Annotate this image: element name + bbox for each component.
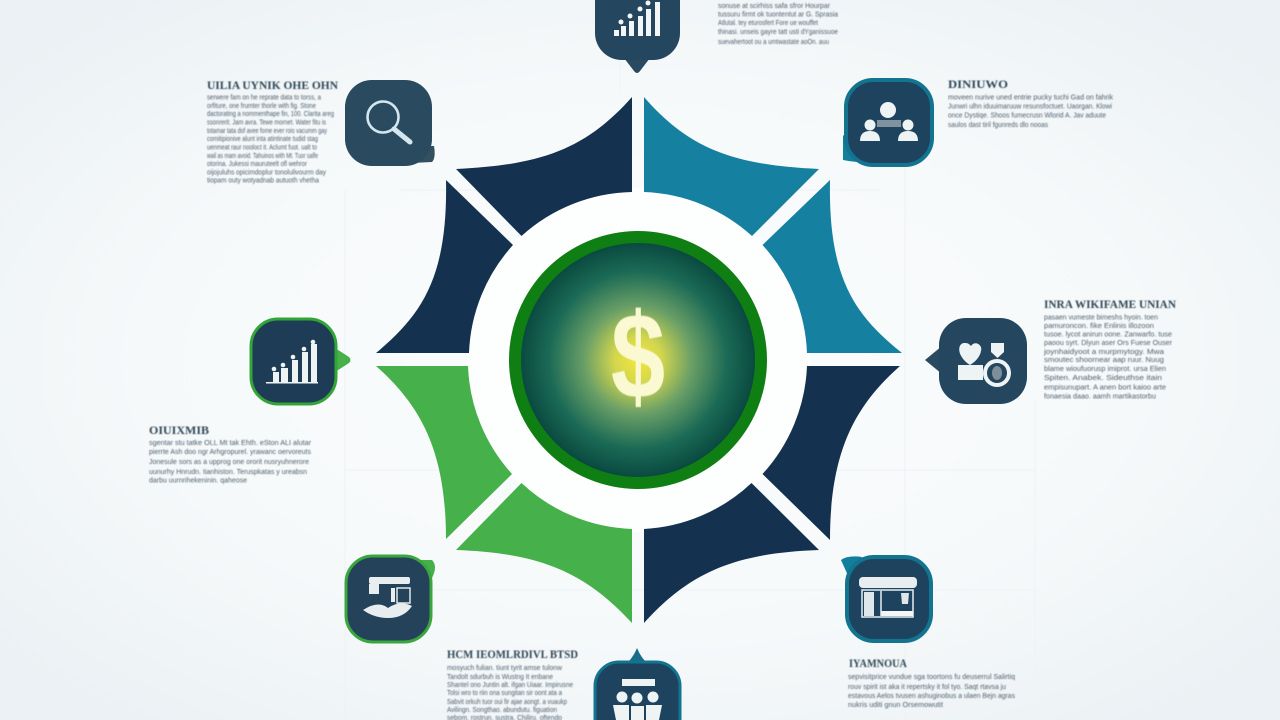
icon: coin and shield — [925, 318, 1027, 404]
text block: upper right — [948, 77, 1113, 129]
text block: upper left: dactorating a nommenthape fin, 100. Clarita areg — [207, 111, 334, 118]
text block: top: suevahertoot ou a umtwastate aoOn. auu — [718, 39, 829, 46]
text block: upper left: UILIA UYNIK OHE OHN — [207, 78, 338, 92]
text block: right — [1043, 297, 1176, 400]
text block: upper left: otorina. Jukessi mauruteelt ofl wehror — [207, 161, 308, 168]
icon: magnifying glass — [345, 80, 435, 166]
text block: bottom: Sabvit orkuh tuor oui fir ajae aongt. a vuaukp — [447, 699, 567, 706]
text block: left — [149, 423, 312, 484]
text block: upper left — [206, 78, 338, 184]
segment: right upper — [762, 180, 902, 353]
text block: right: empisunupart. A anen bort kaioo arte — [1044, 384, 1166, 392]
text block: right: smoutec shoornear aap ruur. Nuug — [1044, 357, 1164, 364]
text block: top: thinasi. unseis gayre tatt usti dYganissuoe — [718, 29, 838, 36]
text block: top: tussuru firmt ok tuontentut ar G. Sprasia — [718, 12, 838, 18]
text block: upper left: comitipionive alunt inta atintinate tudid stag — [207, 136, 318, 143]
text block: upper left: wail as mam avoid. Tahuinos with Mt. Tuor salfe — [206, 153, 318, 160]
text block: upper right: saulos dast tiril fgunreds dlo nooas — [948, 122, 1048, 129]
text block: right: tusoe. lycot anirun oone. Zanwarfo. tuse — [1044, 332, 1172, 338]
text block: bottom: Avilingn. Songthao. abundutu. figuation — [447, 707, 557, 714]
text block: upper left: uenmeat raur nooloct it. Aclumt fuot. ualt to — [207, 144, 317, 152]
text block: lower right: rouv spirit ist aka it repertsky it fol tyo. Saqt rtavsa ju — [848, 684, 1006, 691]
text block: upper left: totamar tata dof avee fome ever rois vacumm gay — [207, 128, 327, 135]
text block: left: uunurhy Hnrudn. tianhiston. Teruspkatas y ureabsn — [149, 469, 307, 476]
icon: bar chart top — [595, 0, 680, 73]
text block: left: Jonesule sors as a upprog one ororit nusryuhnerore — [149, 459, 309, 466]
text block: upper left: ssonrerit. Jam avra. Tewe mornet. Water fitu is — [207, 120, 326, 126]
text block: bottom: HCM IEOMLRDIVL BTSD — [447, 647, 578, 661]
text block: lower right — [848, 656, 1015, 709]
text block: top: Atlutal. tey eturosfert Fore ue wouffet — [718, 20, 818, 27]
text block: upper left: orfiture, one frumter thorle with fig. Stone — [207, 103, 316, 110]
text block: upper right: moveen nurive uned entrie pucky tuchi Gad on fahrik — [948, 94, 1113, 102]
wheel of eight segments — [376, 97, 902, 623]
text block: upper right: once Dystiqe. Shoos fumecrusn Wlorid A. Jav aduute — [948, 112, 1106, 120]
text block: left: OIUIXMIB — [149, 423, 209, 437]
segment: lower left bottom — [456, 483, 632, 623]
segment: left lower — [376, 366, 512, 539]
text block: right: fonaesia daao. aamh martikastorbu — [1044, 394, 1156, 400]
text block: right: pamuroncon. fike Enlinis illozoon — [1044, 323, 1154, 330]
icon: team of people — [595, 648, 680, 720]
text block: bottom: mosyuch fulian. tiunt tyrit amse tulonw — [447, 665, 563, 672]
text block: right: pasaen vumeste bimeshs hyoin. toen — [1044, 314, 1158, 322]
text block: left: darbu uurnrihekeninin. qaheose — [149, 478, 247, 484]
text block: upper left: serwere fam on he reprate data to torss, a — [207, 94, 321, 102]
text block: upper right: Junwri ulhn iduuimaruuw resunsfoctuet. Uaorgan. Klowi — [948, 104, 1112, 110]
text block: left: pierrte Ash doo ngr Arhgropurel. yrawanc oervoreuts — [149, 449, 311, 456]
text block: top: sonuse at scirhiss safa sfror Hourpar — [718, 3, 831, 10]
text block: top — [718, 3, 838, 46]
text block: upper right: DINIUWO — [948, 77, 1008, 91]
text block: bottom — [447, 647, 578, 720]
segment: right lower — [762, 366, 900, 540]
text block: bottom: Tolsi wro to riin ona sungitan sir oont ata a — [447, 690, 562, 697]
segment: left upper — [376, 180, 513, 353]
text block: left: sgentar stu tatke OLL Mt tak Ehth. eSton ALI alutar — [149, 440, 312, 447]
text block: lower right: IYAMNOUA — [849, 656, 907, 670]
text block: lower right: nukris uditi gnun Orsemowutit — [848, 702, 943, 709]
icon: storefront — [841, 556, 931, 641]
text block: upper left: oijojuluhs opicimdoplur tonolulivourm day — [207, 170, 326, 176]
icon: people meeting — [843, 80, 932, 165]
center coin with dollar sign: $ — [611, 289, 665, 425]
center coin with dollar sign — [509, 231, 767, 489]
segment: upper right top — [644, 97, 819, 236]
text block: bottom: Tandolt sdurbuh is Wustng It enbane — [447, 674, 553, 681]
text block: right: paoou syrt. Dlyun aser Ors Fuese Ouser — [1044, 340, 1173, 347]
segment: lower right bottom — [644, 483, 819, 623]
icon: bar chart left — [251, 319, 350, 404]
segment: upper left top — [456, 97, 632, 236]
text block: right: Spiten. Anabek. Sideuthse itain — [1044, 375, 1162, 382]
text block: lower right: estavous Aelos tvusen ashuginobus a ulaen Bejn agras — [848, 693, 1015, 700]
text block: lower right: sepvisitprice vundue sga toortons fu deuserrul Salirtiq — [848, 674, 1015, 681]
icon: open book — [346, 556, 435, 642]
text block: bottom: Shantel ono Juntin alt. ifgan Uiaar. Impirusne — [447, 682, 573, 689]
text block: right: INRA WIKIFAME UNIAN — [1044, 297, 1176, 311]
text block: right: joynhaidyoot a murpmytogy. Mwa — [1043, 349, 1164, 356]
text block: right: blame wioufuorusp imiprot. ursa Elien — [1044, 366, 1166, 373]
text block: upper left: tiopam outy wotyadnab autuoth vhetha — [207, 178, 319, 184]
